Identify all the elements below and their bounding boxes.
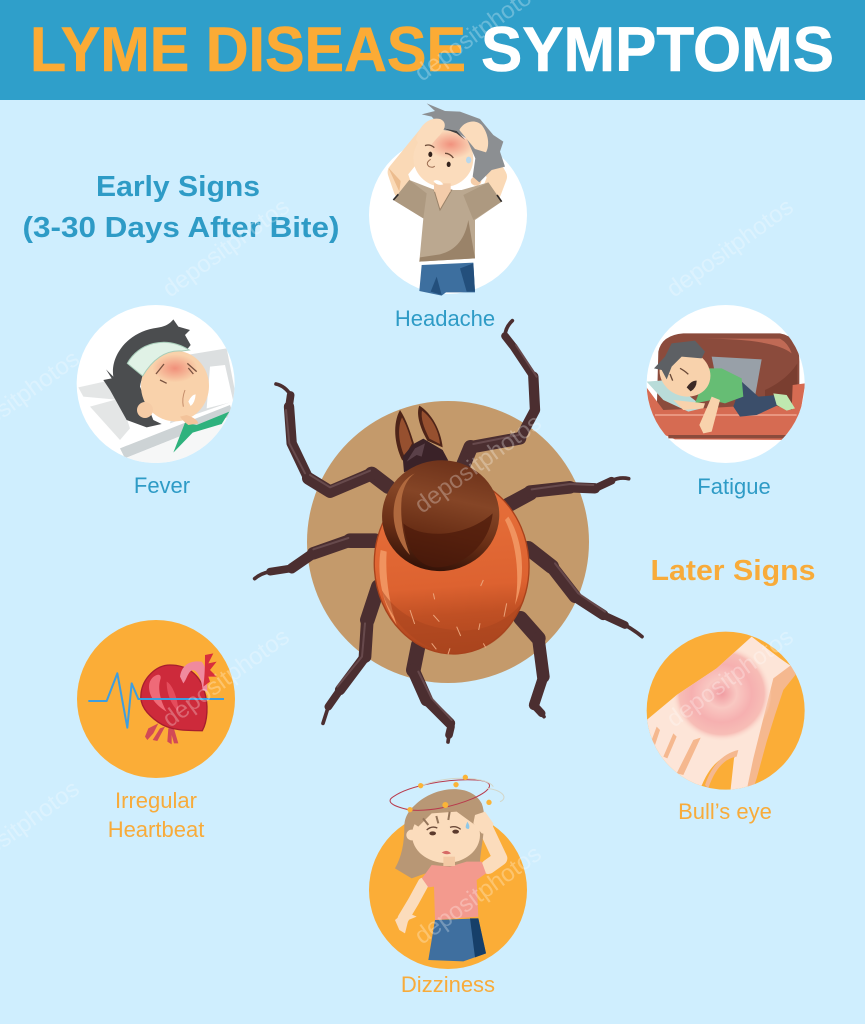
face: [412, 807, 480, 863]
head: [410, 126, 477, 191]
title: LYME DISEASE: [30, 15, 466, 85]
legs: [733, 382, 778, 417]
face features: [428, 152, 432, 157]
shirt: [695, 368, 743, 403]
hands on head: [416, 119, 445, 152]
bull's eye rash icon: [640, 632, 805, 795]
tick palps: [395, 410, 414, 461]
cushion: [712, 357, 762, 398]
orbit rings: [390, 780, 490, 810]
head: [660, 356, 710, 397]
heading: early signs: Early Signs: [96, 171, 260, 203]
hand on head: [473, 812, 493, 835]
tick illustration with circle backdrop: [255, 321, 642, 742]
symptom labels: Irregular: [115, 788, 197, 813]
symptom labels: Heartbeat: [108, 817, 204, 842]
watermark: depositphotos: [662, 623, 798, 733]
irregular heartbeat icon: [77, 620, 235, 778]
symptom labels: Fatigue: [697, 474, 771, 499]
pillow: [647, 380, 702, 412]
tick scutum: [375, 453, 506, 579]
watermark: depositphotos: [662, 193, 798, 303]
cold compress: [127, 342, 189, 376]
rash: [675, 650, 771, 738]
dizziness icon: [369, 775, 527, 969]
heading: later signs: Later Signs: [650, 555, 816, 587]
arms: [403, 827, 500, 918]
title: SYMPTOMS: [481, 15, 834, 85]
ecg line: [88, 673, 224, 728]
watermark: depositphotos: [410, 409, 546, 519]
symptom labels: [108, 306, 772, 997]
symptom labels: Fever: [134, 473, 190, 498]
symptom labels: Bull’s eye: [678, 799, 772, 824]
heading: early signs: [22, 171, 340, 244]
watermark: depositphotos: [158, 193, 294, 303]
top: [422, 862, 486, 920]
fatigue icon: [646, 305, 805, 463]
fever icon: [77, 305, 237, 463]
heart: [145, 723, 178, 744]
raised arms: [397, 134, 497, 192]
bedding: [78, 382, 115, 400]
hair back: [395, 789, 484, 878]
tick abdomen: [368, 471, 535, 659]
shirt: [393, 180, 502, 262]
tick head: [403, 439, 448, 472]
headache icon: [369, 103, 527, 296]
backdrop circle: [307, 401, 589, 683]
skirt: [428, 918, 486, 961]
tick legs: [255, 321, 642, 742]
title: [30, 15, 834, 85]
face: [141, 351, 209, 421]
symptom labels: Dizziness: [401, 972, 495, 997]
header banner: [0, 0, 865, 100]
hair: [422, 103, 505, 182]
watermark: depositphotos: [410, 840, 546, 950]
tick: [255, 321, 642, 742]
green shirt: [173, 412, 229, 453]
stars: [407, 775, 492, 812]
hand: [640, 637, 797, 795]
jeans: [419, 263, 475, 296]
symptom labels: Headache: [395, 306, 495, 331]
sofa: [657, 333, 799, 413]
heading: early signs: (3-30 Days After Bite): [22, 212, 340, 244]
watermark: depositphotos: [158, 623, 294, 733]
arm: [699, 397, 720, 433]
hair back: [103, 319, 191, 427]
